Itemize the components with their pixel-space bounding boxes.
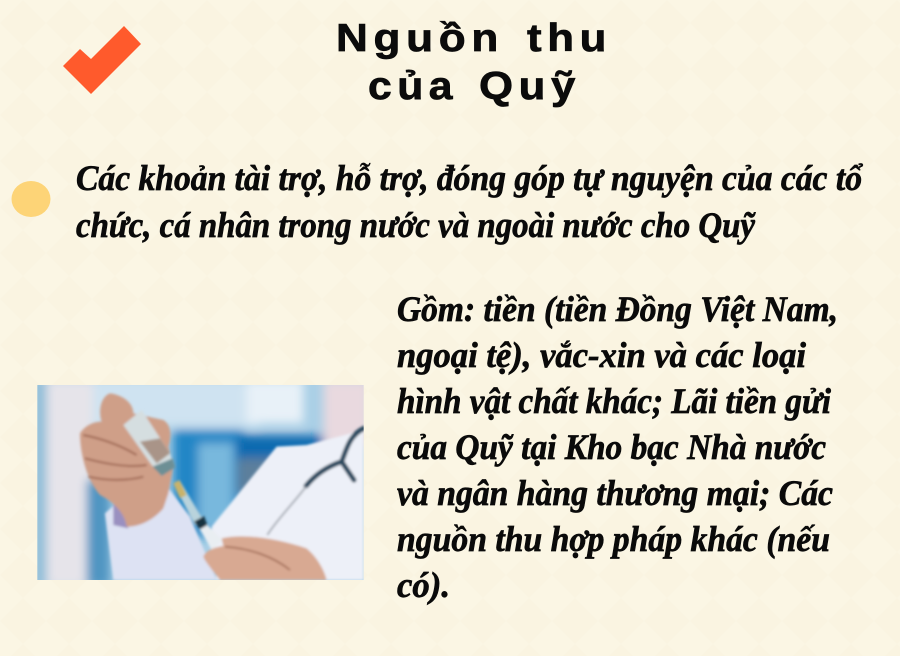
text block: contributions description xyxy=(76,158,863,245)
icon: yellow bullet dot xyxy=(12,181,50,217)
text block: list of revenue types: hình vật chất khác; Lãi tiền gửi xyxy=(397,381,831,421)
lower hand xyxy=(203,536,327,580)
title xyxy=(336,17,612,108)
text block: list of revenue types: ngoại tệ), vắc-xin và các loại xyxy=(397,335,806,375)
text block: contributions description: chức, cá nhân trong nước và ngoài nước cho Quỹ xyxy=(76,205,756,245)
title: thu xyxy=(527,17,612,60)
text block: list of revenue types: nguồn thu hợp pháp khác (nếu xyxy=(397,519,830,559)
coat xyxy=(212,430,364,580)
text block: list of revenue types xyxy=(397,289,838,605)
icon: orange check mark xyxy=(63,26,141,94)
text block: contributions description: Các khoản tài trợ, hỗ trợ, đóng góp tự nguyện của các tổ xyxy=(76,158,863,198)
text block: list of revenue types: của Quỹ tại Kho bạc Nhà nước xyxy=(397,427,826,467)
title: Quỹ xyxy=(479,65,581,108)
title: Nguồn xyxy=(336,17,504,60)
text block: list of revenue types: và ngân hàng thương mại; Các xyxy=(397,473,833,513)
syringe xyxy=(180,482,204,526)
text block: list of revenue types: Gồm: tiền (tiền Đồng Việt Nam, xyxy=(397,289,838,329)
vial xyxy=(122,411,172,468)
photo: doctor hands filling a syringe from a vaccine vial xyxy=(33,380,370,587)
upper hand xyxy=(80,393,173,527)
title: của xyxy=(368,65,458,108)
stethoscope xyxy=(306,428,364,486)
text block: list of revenue types: có). xyxy=(397,565,450,605)
